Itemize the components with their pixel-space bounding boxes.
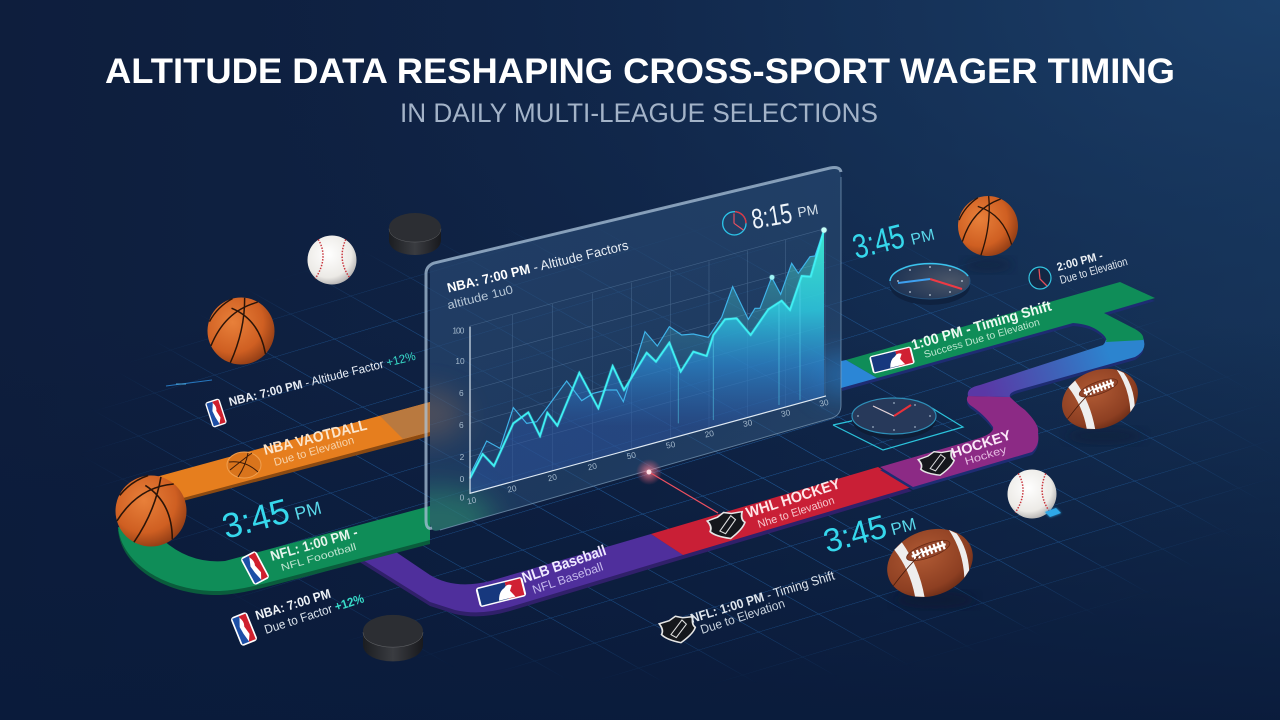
ribbon: red NHL <box>651 467 912 555</box>
chart axis labels: 10 <box>466 495 478 506</box>
chart axis labels: 30 <box>818 397 830 409</box>
clock dial top right <box>890 263 970 305</box>
label: 2:00 PM due to elevation: Due to Elevation <box>1059 256 1129 287</box>
baseball left <box>308 236 356 284</box>
basketball top right <box>963 257 1013 273</box>
chart axis labels: 6 <box>459 420 464 430</box>
panel time: 8:15 <box>749 197 794 235</box>
label: NFL ribbon text: NFL Foootball <box>280 542 358 574</box>
ribbon: green NFL <box>118 506 430 591</box>
label: NFL timing shift: Due to Elevation <box>699 596 787 637</box>
chart axis labels: 30 <box>780 407 792 419</box>
glass chart panel <box>424 166 842 531</box>
ribbon: magenta hockey <box>880 396 1038 487</box>
chart axis labels: 2 <box>460 452 465 462</box>
time: left 3:45 PM: 3:45 <box>218 491 294 547</box>
baseball right <box>1008 470 1056 518</box>
label: NBA basketball ribbon text <box>227 417 369 478</box>
ribbon: purple and red lower track <box>358 467 912 616</box>
chart axis labels: 6 <box>459 388 464 398</box>
time: top right 3:45 PM: 3:45 <box>849 217 908 267</box>
chart axis labels: 50 <box>665 439 677 451</box>
chart axis labels <box>452 325 830 506</box>
label: MLB ribbon text <box>475 542 609 608</box>
label: NBA due to factor: Due to Factor +12% <box>263 591 366 637</box>
basketball on track <box>116 476 186 546</box>
time: left 3:45 PM: PM <box>292 498 324 524</box>
label: NBA altitude factor: NBA: 7:00 PM - Altitude Factor +12% <box>227 349 417 409</box>
label: 2:00 PM due to elevation <box>1029 250 1129 289</box>
label: timing shift ribbon text <box>869 298 1054 374</box>
label: NBA due to factor <box>230 586 366 647</box>
chart axis labels: 20 <box>506 483 518 495</box>
label: hockey ribbon text <box>917 426 1014 480</box>
chart axis labels: 0 <box>460 493 465 503</box>
chart axis labels: 10 <box>455 356 465 366</box>
label: NFL timing shift: NFL: 1:00 PM - Timing Shift <box>688 568 837 626</box>
label: NBA altitude factor <box>205 349 417 428</box>
chart axis labels: 50 <box>626 450 637 461</box>
basketball upper left <box>202 292 280 370</box>
label: NFL ribbon text: NFL: 1:00 PM - <box>268 524 360 564</box>
ribbon: green timing shift <box>846 282 1155 378</box>
label: hockey ribbon text: HOCKEY <box>949 426 1014 461</box>
label: NBA basketball ribbon text: NBA VAOTDALL <box>262 417 369 459</box>
label: NBA basketball ribbon text: Due to Elevation <box>273 434 356 469</box>
time: bottom 3:45 PM: PM <box>889 514 918 539</box>
label: timing shift ribbon text: Success Due to Elevation <box>923 317 1041 361</box>
pointer line with glow <box>636 459 718 513</box>
title: ALTITUDE DATA RESHAPING CROSS-SPORT WAGER TIMING <box>105 51 1175 91</box>
chart axis labels: 20 <box>587 461 598 472</box>
label: hockey ribbon text: Hockey <box>963 444 1009 468</box>
label: MLB ribbon text: NFL Baseball <box>530 560 605 597</box>
chart title: NBA: 7:00 PM - Altitude Factors <box>446 238 630 296</box>
chart axis labels: 100 <box>452 325 465 335</box>
label: NHL ribbon text <box>706 475 842 543</box>
ribbon: right S-curve track <box>841 282 1155 490</box>
chart: altitude line chart: PM <box>796 201 820 220</box>
ribbon: orange NBA basketball <box>156 402 430 498</box>
football right <box>1067 427 1143 445</box>
time: left 3:45 PM <box>218 483 325 547</box>
ribbon: purple MLB <box>358 534 683 612</box>
label: NFL ribbon text <box>240 524 360 586</box>
chart axis labels: 20 <box>704 428 715 440</box>
subtitle: IN DAILY MULTI-LEAGUE SELECTIONS <box>400 98 878 128</box>
label: NFL timing shift <box>658 568 837 646</box>
time: bottom 3:45 PM: 3:45 <box>819 507 891 560</box>
chart: altitude line chart <box>446 197 830 506</box>
cyan marker <box>1045 508 1061 517</box>
time: bottom 3:45 PM <box>819 500 919 560</box>
chart axis labels: 30 <box>742 417 754 429</box>
label: timing shift ribbon text: 1:00 PM - Timing Shift <box>910 298 1054 354</box>
label: MLB ribbon text: NLB Baseball <box>520 542 609 587</box>
chart subtitle: altitude 1u0 <box>446 282 515 312</box>
icon: panel clock <box>723 212 746 235</box>
time: top right 3:45 PM: PM <box>909 227 937 249</box>
light flare <box>166 380 212 386</box>
puck top <box>389 213 441 255</box>
label: 2:00 PM due to elevation: 2:00 PM - <box>1056 250 1104 274</box>
ribbon: blue panel connector <box>841 360 877 388</box>
label: NBA due to factor: NBA: 7:00 PM <box>253 586 332 623</box>
chart axis labels: 20 <box>547 472 558 483</box>
ribbon: blue-purple connector <box>968 338 1144 397</box>
puck bottom <box>363 615 423 661</box>
ribbon: left orange and green track <box>118 402 430 595</box>
football bottom <box>895 591 975 609</box>
clock dial with cyan frame <box>833 398 963 450</box>
label: NHL ribbon text: WHL HOCKEY <box>744 475 842 522</box>
label: NHL ribbon text: Nhe to Elevation <box>756 495 836 531</box>
chart axis labels: 0 <box>460 474 465 484</box>
